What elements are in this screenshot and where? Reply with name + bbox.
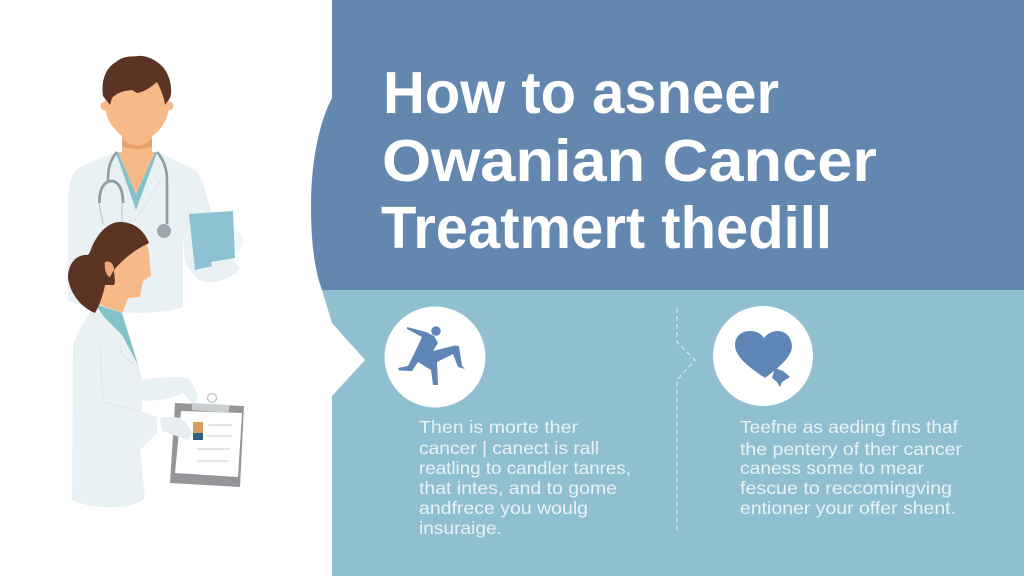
text block: right column: caness some to mear <box>740 458 924 478</box>
text block: left column: reatling to candler tanres, <box>419 458 631 478</box>
panel: dark blue title section <box>311 0 1024 290</box>
text block: right column <box>740 417 962 518</box>
title: Owanian Cancer <box>382 128 877 194</box>
hand on clipboard <box>160 417 192 440</box>
text block: right column: the pentery of ther cancer <box>740 439 962 459</box>
text block: right column: entioner your offer shent. <box>740 498 956 518</box>
text block: left column: insuraige. <box>419 518 502 538</box>
glove <box>226 230 244 252</box>
title <box>381 60 877 261</box>
coat lapel <box>135 178 160 220</box>
illustration: female doctor with clipboard <box>68 222 244 507</box>
title: How to asneer <box>383 60 779 126</box>
coat lapel <box>100 345 142 412</box>
stethoscope <box>99 152 167 224</box>
neck and V skin <box>118 132 155 194</box>
text block: left column: that intes, and to gome <box>419 478 617 498</box>
face <box>105 72 169 142</box>
scrubs collar <box>116 152 157 210</box>
text block: left column: cancer | canect is rall <box>419 438 599 458</box>
text block: right column: Teefne as aeding fins thaf <box>740 417 958 437</box>
title: Treatmert thedill <box>381 195 832 261</box>
illustration: male doctor <box>68 56 244 313</box>
hair <box>68 222 149 313</box>
coat <box>68 152 240 313</box>
divider with arrow <box>677 308 695 530</box>
neck and face <box>98 232 151 313</box>
text block: left column: andfrece you woulg <box>419 498 588 518</box>
hair <box>103 56 171 105</box>
text block: left column <box>419 417 631 538</box>
folder <box>189 211 235 270</box>
text block: left column: Then is morte ther <box>419 417 578 437</box>
icon: running figure in circle <box>384 306 486 408</box>
scrubs <box>95 304 138 365</box>
ear <box>105 261 114 277</box>
coat <box>72 305 198 507</box>
icon: heart in circle <box>713 306 813 406</box>
panel: light blue lower section <box>322 290 1024 576</box>
clipboard <box>170 394 244 487</box>
text block: right column: fescue to reccomingving <box>740 478 952 498</box>
